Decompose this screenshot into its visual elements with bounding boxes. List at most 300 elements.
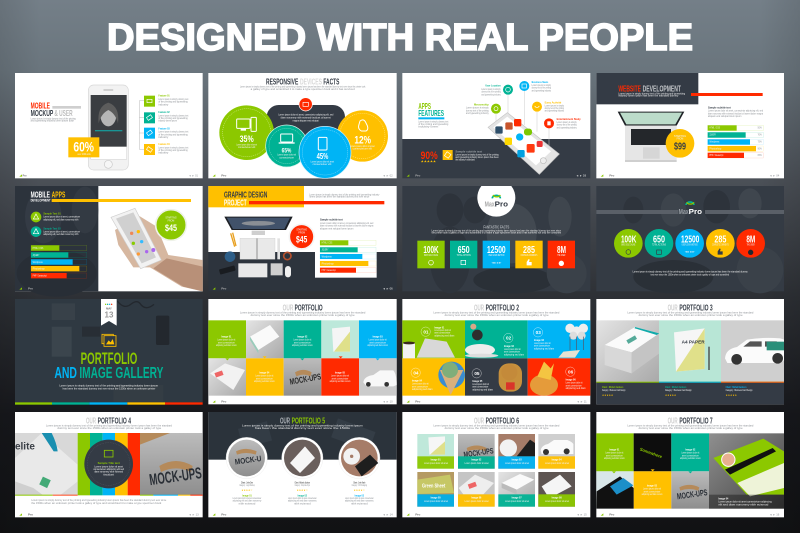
captions: amet consectetuer: [369, 341, 386, 344]
captions: client three: Client : John Karlo: [353, 480, 366, 484]
callout: starting price $45: $45: [165, 223, 177, 233]
captions: adipiscing sed diam: [504, 354, 524, 356]
info band: Client : Michell Jackson: [665, 385, 687, 389]
heading: OUR: [474, 303, 484, 312]
accent bar: [249, 201, 384, 204]
stat: 90 percent rating: ★★★★★: [421, 159, 436, 163]
stat circle: 8M: [736, 229, 765, 258]
callout: starting price $45: [156, 210, 186, 240]
heading: Lorem ipsum is simply dummy text of the printing and typesetting industry lorem ipsum: [242, 425, 363, 428]
callout: starting price $45: FROM: [298, 232, 305, 234]
bookmark date badge: 13: [105, 311, 114, 320]
feature pins: dummy text of the printing: [532, 87, 551, 90]
heading: graphic design project: GRAPHIC DESIGN: [224, 190, 267, 200]
chart: skill bars: 90%: [758, 148, 762, 150]
captions: amet consectetuer: [472, 386, 489, 389]
heading: Lorem ipsum is simply dummy text of the printing and typesetting industry lorem ipsum has been the standard: [433, 312, 560, 315]
chart: skill bars: PHP / Javascript: [33, 275, 47, 278]
captions: client three: [345, 480, 374, 505]
card: image 08: Image 08: [552, 496, 562, 500]
text block: caption: Lorem ipsum is simply dummy text of the printing and typesetting industry lorem ipsum has been the standard dummy text ever since: [31, 499, 167, 502]
captions: Lorem ipsum dolor sit: [643, 488, 661, 491]
captions: Image 03: [534, 338, 544, 342]
card: image 04: Lorem ipsum dolor sit amet: [545, 462, 569, 465]
panel: fantastic facts circle slide: [596, 186, 784, 293]
accent bar: [691, 93, 763, 96]
callout: sample subtitle: Sample subtitle text: [455, 149, 482, 153]
chart: blue circle 45 percent: Lorem ipsum dolor sit amet: [311, 160, 334, 163]
captions: Lorem ipsum dolor sit: [504, 348, 521, 351]
footer logo: Pro: [221, 174, 227, 178]
heading: mobile mockup: Lorem ipsum is simply dummy text of the printing: [31, 117, 76, 120]
heading: dummy text ever since the 1500s when an unknown printer took a galley of type: [639, 314, 744, 317]
text block: sample subtitle: Sample subtitle text: [320, 218, 343, 222]
heading: OUR: [86, 416, 96, 425]
captions: elit sed diam nonummy nibh euismod: [718, 503, 769, 506]
stat circle: 285: 285: [714, 235, 727, 246]
heading: dummy text ever since the 1500s when an unknown printer took a galley of type: [251, 314, 356, 317]
captions: Image 01: [221, 335, 232, 339]
footer logo: ◄ ► 11: [577, 401, 588, 404]
heading: OUR: [280, 416, 290, 425]
logo badge: Max: [485, 201, 495, 208]
heading: OUR: [283, 303, 293, 312]
heading: responsive devices facts: FACTS: [323, 77, 340, 87]
people photo background: [402, 186, 590, 293]
feature pins: and typesetting industry: [545, 110, 565, 113]
footer logo: Pro: [221, 287, 227, 291]
dark centre shape: diam nonummy nibh euismod tincidunt ut laoreet: [281, 116, 331, 119]
captions: Lorem ipsum dolor sit: [605, 452, 624, 455]
colour grid: [402, 320, 590, 396]
feature items: Sample Text 01: [43, 212, 61, 216]
photo: mock-ups: MOCK-UPS: [148, 465, 203, 489]
captions: amet consectetuer: [256, 377, 273, 380]
footer logo: ◄ ► 15: [577, 514, 587, 517]
number badges: 01: [423, 329, 429, 334]
heading: Lorem ipsum is simply dummy text of the printing and typesetting industry lorem ipsum has been the standard: [240, 312, 366, 315]
captions: amet consectetuer: [534, 345, 550, 348]
captions: client one: adipiscing elit sed diam nonummy: [233, 500, 262, 503]
panel: our portfolio 5 slide: [208, 412, 397, 517]
photo: flyer: A4 PAPER: [682, 340, 705, 345]
photo circle: mock-up: MOCK-U: [234, 454, 262, 467]
stat: 90 percent rating: [421, 150, 438, 163]
callout: dark circle: consectetuer adipiscing elit sed: [93, 468, 125, 471]
heading: website development: Lorem ipsum is simply dummy text of the printing and typesetting: [618, 92, 686, 95]
captions: [412, 325, 586, 391]
feature pins: and typesetting industry: [466, 112, 489, 115]
chart: yellow circle 12 percent: Lorem ipsum dolor sit amet: [350, 145, 375, 148]
captions: amet consectetuer: [218, 341, 235, 344]
chart: skill bars: Wordpress: [322, 255, 332, 258]
heading: website development: WEBSITE: [618, 84, 641, 94]
stat circle: 12500: [675, 229, 704, 258]
stat card: 12500: USER LOGIN METHOD: [488, 255, 505, 257]
number badges: 04: [413, 370, 419, 375]
text block: divider caption: has been the standard dummy text ever since the 1500s when an unknown printer: [63, 387, 156, 390]
heading: fantastic facts: Lorem ipsum is simply dummy text of the printing and typesetting industry lorem ipsum has been the standard dummy text ever since: [432, 230, 562, 233]
chart: skill bars: 50%: [758, 128, 762, 130]
footer logo: Pro: [415, 174, 421, 178]
captions: [216, 335, 388, 383]
chart: skill bars: Wordpress: [709, 141, 720, 144]
icon: red badge: [299, 98, 312, 111]
captions: client one: Image 01: [242, 493, 252, 497]
stat card: 100K: 100K: [423, 245, 439, 256]
footer logo: [213, 174, 393, 178]
heading: website development: DEVELOPMENT: [643, 84, 681, 94]
heading: responsive devices facts: Lorem ipsum is simply dummy text of the printing and typesetting industry lorem ipsum has been the standard dummy text ever since the printer took: [240, 86, 366, 89]
dark centre shape: [267, 105, 345, 148]
captions: client two: Category : Corporate Flyer: [295, 484, 310, 487]
info band: Client : Michell Jackson: [602, 385, 624, 389]
feature list: Feature 03: [158, 126, 170, 130]
chart: teal circle 65 percent: 65%: [282, 148, 291, 155]
chart: skill bars: 75%: [758, 142, 762, 144]
logo band: Max: [679, 209, 689, 216]
captions: adipiscing sed diam nonum: [330, 381, 350, 383]
captions: amet consectetuer: [504, 351, 520, 354]
feature items: Lorem ipsum dolor sit amet, consectetuer: [43, 216, 80, 219]
panel: portfolio divider slide: [15, 299, 203, 405]
captions: client one: [233, 480, 262, 505]
stat card: 100K: BIRDS SOLD ONLINE: [424, 255, 438, 257]
captions: adipiscing sed diam nonum: [680, 458, 701, 460]
stat card: 12500: 12500: [487, 245, 506, 256]
footer logo: [19, 174, 199, 178]
captions: Lorem ipsum dolor sit: [293, 339, 312, 342]
heading: has been the standard dummy text ever since the 1500s: [255, 427, 351, 430]
footer logo: Pro: [28, 287, 33, 291]
card: image 07: Image 07: [512, 496, 522, 500]
heading: mobile mockup: & USER: [54, 108, 73, 118]
footer logo: ◄ ► 01: [189, 175, 199, 178]
panel: our portfolio 6 slide: [402, 412, 590, 517]
desk objects: [219, 217, 293, 277]
callout: dark circle: diam nonummy nibh euismod: [94, 472, 124, 474]
chart: skill bars: PHP / Javascript: [709, 154, 724, 157]
feature pins: dummy text of the printing: [481, 91, 501, 94]
feature list: Feature 02: [158, 110, 170, 114]
heading: and image gallery: [54, 365, 163, 382]
chart: skill bars: Photoshop: [33, 268, 45, 271]
captions: Image 01: [609, 448, 620, 452]
captions: client three: ★★★★☆: [354, 488, 366, 492]
heading: PORTFOLIO 7: [679, 416, 713, 425]
heading: dummy text ever since the 1500s when an unknown printer took a galley of type: [639, 427, 744, 430]
captions: client two: adipiscing elit sed diam nonummy: [288, 500, 317, 503]
captions: client three: Lorem ipsum dolor sit amet consectetuer: [345, 497, 374, 500]
footer logo: Pro: [609, 513, 615, 517]
feature list: of the printing and typesetting: [158, 149, 188, 152]
panel: apps features slide: [402, 73, 590, 178]
dark lower band: [208, 252, 397, 291]
footer logo: Pro: [28, 513, 33, 517]
callout: starting price $45: $45: [296, 234, 307, 244]
captions: amet consectetuer: [294, 341, 311, 344]
callout: starting price $45: STARTING: [296, 229, 307, 232]
feature pins: User Location: [485, 84, 501, 88]
card: image 01: Lorem ipsum dolor sit amet: [424, 462, 448, 465]
info band: ★★★★★: [602, 393, 614, 397]
heading: dummy text ever since the 1500s when an unknown printer took a galley of type: [57, 427, 162, 430]
footer logo: Pro: [221, 400, 227, 404]
feature list: of the printing and typesetting: [158, 117, 188, 120]
captions: adipiscing sed diam nonum: [604, 458, 625, 460]
heading: PORTFOLIO: [295, 303, 323, 312]
photo: stationery: elite: [15, 442, 35, 453]
stat circle: 100K: 100K: [621, 235, 637, 246]
feature list: [139, 94, 189, 155]
heading: mobile mockup: MOCKUP: [31, 108, 54, 118]
heading: PORTFOLIO 5: [292, 416, 325, 425]
captions: amet consectetuer: [412, 385, 428, 388]
heading: [242, 416, 363, 430]
feature pins: and typesetting industry: [532, 89, 552, 92]
gallery grid: [208, 320, 397, 396]
feature pins: Easy Activité: [545, 100, 562, 104]
footer logo: ◄ ► 02: [383, 175, 393, 178]
heading: fantastic facts: [432, 224, 562, 235]
info band: Category : Business Card Design: [726, 389, 753, 392]
stat circle: 650: 650: [653, 235, 665, 246]
captions: client one: Lorem ipsum dolor sit amet consectetuer: [233, 497, 261, 500]
feature items: Lorem ipsum dolor sit amet, consectetuer: [43, 230, 80, 233]
heading: portfolio: PORTFOLIO: [81, 349, 137, 368]
chart: blue circle 45 percent: 45%: [317, 152, 328, 161]
chart: skill bars: HTML / CSS: [33, 248, 44, 250]
footer logo: Pro: [415, 513, 421, 517]
chart: skill bars: PHP / Javascript: [322, 269, 336, 272]
footer logo: ◄ ► 03: [576, 175, 587, 178]
logo badge: Pro: [495, 201, 508, 208]
number badges: 03: [536, 330, 541, 335]
panel: fantastic facts square slide: [402, 186, 590, 293]
info band: ★★★★★: [726, 393, 738, 397]
feature list: Lorem ipsum is simply dummy text: [158, 98, 189, 101]
captions: client one: nibh euismod: [239, 503, 256, 505]
yellow header block: [208, 186, 304, 207]
chart: skill bars: HTML / CSS: [709, 128, 720, 130]
callout: starting price $99: STARTING: [674, 135, 686, 138]
stat card: 12500: [483, 241, 510, 268]
card: image 07: [498, 472, 535, 507]
dark photo column: [15, 186, 98, 297]
card: image 05: [417, 472, 454, 507]
card: image 08: [538, 472, 575, 507]
feature pins: Messenship: [474, 103, 489, 107]
card: image 02: MOCK-UPS: [463, 446, 494, 459]
callout: starting price $99: [666, 129, 694, 158]
feature pins: dummy text of the printing: [557, 124, 577, 127]
feature pins: Entertainment Study: [557, 117, 581, 121]
text block: sample subtitle: [708, 106, 764, 118]
captions: Lorem ipsum dolor sit: [534, 342, 551, 345]
feature list: industry: [158, 103, 169, 106]
white card: [315, 248, 377, 278]
chart: skill bars: [31, 245, 87, 278]
logo badge: [477, 186, 515, 217]
stat circle: 285: [706, 229, 735, 258]
captions: client one: Category : Logo Mockup: [239, 484, 255, 487]
photo: flyer on wood: [709, 433, 784, 509]
gallery grid: MOCK-UPS: [289, 371, 322, 387]
heading: and image gallery: IMAGE GALLERY: [79, 365, 163, 382]
stat card: 8M: [548, 241, 575, 268]
chart: teal circle 65 percent: consectetuer: [279, 156, 294, 159]
heading: [46, 416, 173, 430]
photo circle: mock-up: [226, 437, 267, 479]
captions: Image 02: [685, 448, 696, 452]
captions: amet consectetuer: [332, 377, 349, 380]
icon: laptop: [618, 112, 684, 162]
captions: Image 02: [297, 335, 308, 339]
heading: responsive devices facts: RESPONSIVE: [266, 77, 299, 87]
captions: Image 06: [566, 378, 576, 382]
stat circle: 12500: 12500: [681, 235, 700, 246]
captions: client two: Image 02: [298, 493, 307, 497]
bookmark date badge: [101, 299, 117, 326]
callout: 60 percent: over 1000 units: [77, 153, 91, 156]
info band: ★★★★★: [665, 393, 677, 397]
feature list: industry: [158, 152, 169, 155]
heading: Lorem ipsum is simply dummy text of the printing and typesetting industry lorem ipsum has been the standard: [433, 425, 560, 428]
chart: yellow circle 12 percent: 12%: [354, 134, 371, 146]
panel: our portfolio slide: [208, 299, 397, 404]
feature list: Lorem ipsum is simply dummy text: [158, 131, 189, 134]
heading: mobile mockup: [31, 100, 81, 123]
heading: website development: [618, 84, 686, 98]
footer logo: [213, 513, 393, 517]
heading: mobile mockup: and typesetting industry lorem ipsum dolor: [31, 120, 74, 123]
feature pins: Lorem ipsum is simply: [481, 88, 501, 91]
card: image 07: Lorem ipsum dolor sit amet: [505, 500, 529, 503]
card: image 03: Image 03: [512, 458, 522, 462]
card: image 04: Image 04: [552, 458, 562, 462]
callout: sample subtitle: Lorem ipsum is simply dummy text of the printing: [455, 153, 499, 156]
heading: [627, 416, 754, 430]
heading: mobile apps: APPS: [52, 190, 66, 200]
captions: Lorem ipsum dolor sit amet consectetuer adipiscing: [718, 501, 772, 504]
stat circle: 12500: ◂●●▸: [685, 251, 695, 254]
stat circle: 100K: [614, 229, 643, 258]
footer logo: ◄ ► 10: [383, 401, 393, 404]
callout: dark circle: Lorem ipsum dolor sit amet: [94, 465, 123, 468]
heading: graphic design project: PROJECT: [224, 197, 247, 207]
feature list: Lorem ipsum is simply dummy text: [158, 146, 189, 149]
heading: mobile mockup: MOBILE: [31, 100, 50, 110]
photo: flyer: [659, 320, 721, 382]
captions: client two: [288, 480, 317, 505]
stat circle: 8M: THE USER: [747, 245, 755, 247]
heading: dummy text ever since the 1500s when an unknown printer took a galley of type: [445, 427, 550, 430]
colour stripes: [78, 433, 140, 495]
chart: skill bars: JQUERY: [33, 255, 40, 257]
stat card: 650: [450, 241, 477, 268]
footer logo: ◄ ► 16: [769, 514, 780, 517]
captions: adipiscing sed diam nonum: [367, 345, 388, 347]
captions: client three: Category : CD Packaging: [352, 484, 367, 487]
footer logo: ◄ ► 13: [189, 514, 199, 517]
feature list: Feature 04: [158, 142, 170, 146]
panel: website development slide: [596, 73, 784, 178]
captions: Image 02: [504, 344, 514, 348]
card: image 01: [417, 434, 454, 469]
callout: 60 percent: [68, 137, 99, 157]
photo: branded car: [721, 320, 784, 382]
captions: Image 03: [373, 335, 383, 339]
heading: apps features: industry lorem: [418, 125, 438, 128]
chart: teal circle 65 percent: [266, 125, 308, 167]
heading: PORTFOLIO 6: [486, 416, 519, 425]
stat circle: 100K: BIRDS SOLD ONLINE: [621, 245, 636, 247]
accent bar: [52, 199, 191, 202]
heading: mobile apps: DEVELOPMENT: [31, 199, 51, 203]
text block: sample subtitle: [320, 218, 374, 230]
number badges: 02: [506, 336, 512, 341]
captions: client two: Lorem ipsum dolor sit amet consectetuer: [288, 497, 317, 500]
feature list: Lorem ipsum is simply dummy text: [158, 114, 189, 117]
footer logo: [407, 174, 587, 178]
footer logo: [213, 287, 393, 291]
captions: amet consectetuer: [682, 454, 699, 457]
captions: Lorem ipsum dolor sit: [566, 382, 583, 385]
stat circle: 12500: USER LOGIN METHOD: [682, 245, 698, 247]
text block: caption: the 1500s when an unknown printer took a galley of type and scrambled it to make a type specimen book: [31, 502, 162, 505]
captions: client two: Client : Michele Jackson: [295, 480, 310, 484]
heading: PORTFOLIO 2: [486, 303, 519, 312]
info band: [596, 382, 784, 404]
photo: stationery: [15, 433, 78, 495]
card: image 05: Green Sheet: [422, 483, 445, 489]
text block: sample subtitle: Lorem ipsum dolor sit amet, consectetur adipiscing elit, sed: [320, 222, 374, 225]
feature list: industry lorem ipsum: [158, 120, 177, 123]
captions: amet consectetuer: [434, 332, 451, 335]
heading: graphic design project: lorem ipsum has been the standard dummy text ever since: [309, 196, 370, 199]
card: image 06: Lorem ipsum dolor sit amet: [465, 500, 489, 503]
number badges: 06: [568, 369, 574, 374]
panel: graphic design project slide: [208, 186, 397, 291]
text block: sample subtitle: Sample subtitle text: [708, 106, 731, 110]
feature list: Feature 01: [158, 94, 170, 98]
captions: adipiscing sed diam nonum: [292, 345, 313, 347]
captions: Lorem ipsum dolor sit: [434, 329, 451, 332]
captions: Lorem ipsum dolor sit: [681, 452, 700, 455]
text block: sample subtitle: aliquam erat volutpat lorem ipsum: [708, 115, 741, 118]
callout: sample subtitle: and typesetting industry lorem ipsum has been: [455, 156, 499, 159]
feature pins: Business News: [532, 80, 549, 84]
chart: blue circle 45 percent: [299, 126, 351, 178]
logo band: Pro: [689, 209, 702, 216]
gallery grid: [596, 433, 709, 509]
info band: Client : Michell Jackson: [726, 385, 747, 389]
card: image 06: [458, 472, 495, 507]
heading: graphic design project: Lorem ipsum is simply dummy text of the printing and typesetting industry: [309, 193, 380, 196]
colour strip: [15, 402, 203, 405]
feature items: [31, 212, 80, 237]
heading: apps features: APPS: [418, 101, 431, 111]
feature pins: Lorem ipsum is simply: [532, 84, 552, 87]
card: image 04: [538, 434, 575, 469]
captions: Lorem ipsum dolor sit: [217, 339, 236, 342]
captions: adipiscing sed diam: [534, 348, 554, 350]
captions: Lorem ipsum dolor sit: [331, 375, 349, 378]
captions: adipiscing sed diam: [412, 389, 433, 391]
panel: mobile mockup slide: [15, 73, 203, 178]
callout: sample subtitle: [443, 149, 499, 162]
heading: apps features: of the printing and typesetting: [418, 123, 449, 126]
